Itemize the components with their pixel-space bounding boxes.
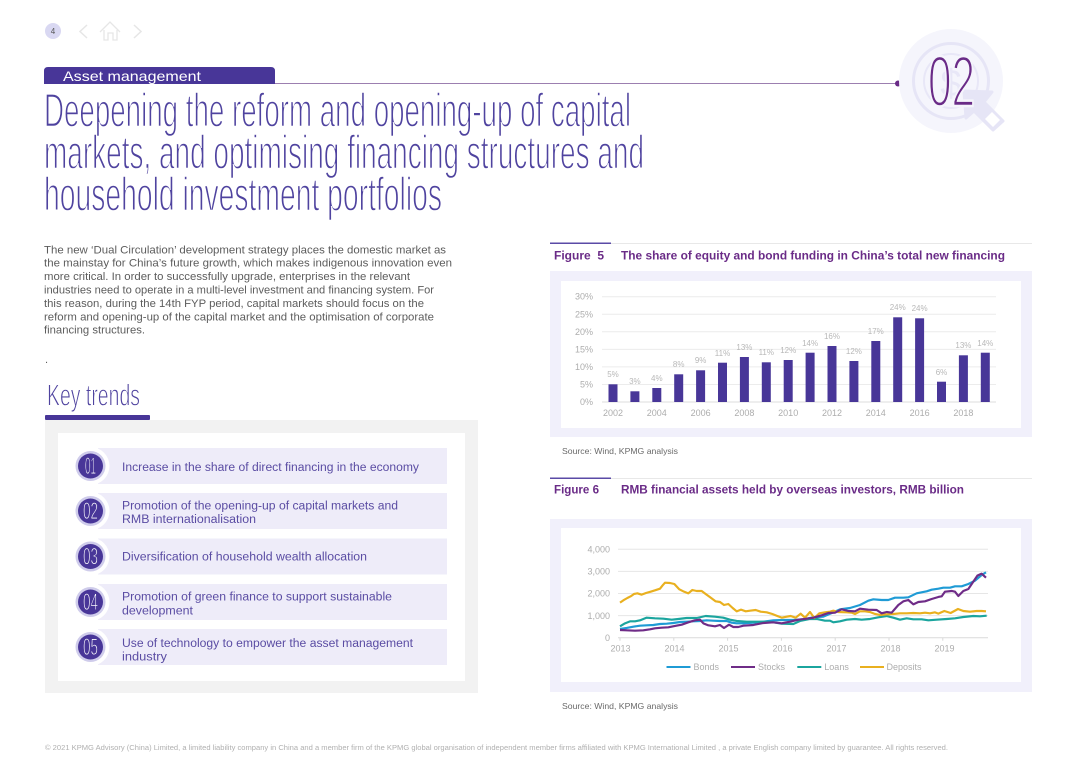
data labels [607, 303, 993, 386]
figure 6 heading: RMB financial assets held by overseas investors, RMB billion [621, 485, 964, 497]
y axis and grid: 0% [580, 397, 593, 407]
data labels: 11% [759, 348, 774, 357]
trend 02 [72, 492, 447, 530]
section tab: Asset management [63, 68, 201, 84]
x axis labels: 2015 [718, 644, 739, 654]
trend 04 [72, 583, 447, 621]
x axis labels: 2013 [610, 644, 631, 654]
x axis labels: 2019 [934, 644, 955, 654]
data labels: 3% [629, 377, 641, 386]
trend 02: RMB internationalisation [122, 514, 256, 526]
trend 02: 02 [83, 498, 98, 525]
legend: Stocks [758, 662, 786, 672]
figure 5 source: Source: Wind, KPMG analysis [562, 446, 678, 456]
y axis and grid [587, 544, 988, 643]
intro text block: . [45, 354, 48, 366]
intro text block: more critical. In order to successfully upgrade, enterprises in the relevant [44, 271, 410, 283]
y axis and grid: 2,000 [587, 589, 610, 599]
x axis labels: 2017 [826, 644, 847, 654]
trend 04: development [122, 605, 194, 617]
series: loans [620, 616, 987, 626]
trend 05: Use of technology to empower the asset management [122, 638, 414, 650]
y axis and grid [575, 292, 996, 407]
legend: Deposits [886, 662, 922, 672]
data labels: 12% [780, 346, 796, 355]
series: stocks [620, 574, 986, 631]
main title: markets, and optimising financing structures and [44, 126, 644, 178]
y axis and grid: 1,000 [587, 611, 610, 621]
data labels: 9% [695, 356, 706, 365]
icon: previous arrow [80, 25, 87, 38]
y axis and grid: 5% [580, 380, 593, 390]
panel: figure 6 line chart [550, 519, 1032, 692]
x axis labels: 2016 [910, 408, 930, 418]
section number emblem: $ [940, 63, 962, 105]
legend: Bonds [694, 662, 720, 672]
section number: 02 [928, 43, 975, 122]
trend 03: Diversification of household wealth allocation [122, 552, 367, 564]
trend 04: 04 [83, 589, 98, 616]
y axis and grid: 0 [605, 633, 610, 643]
figure 6 heading: Figure 6 [554, 485, 599, 497]
data labels: 14% [977, 339, 993, 348]
navigation bar [45, 22, 141, 40]
data labels: 8% [673, 360, 684, 369]
main title [44, 84, 644, 220]
x axis labels: 2014 [866, 408, 886, 418]
series: deposits [620, 583, 986, 618]
intro text block: this reason, during the 14th FYP period, capital markets should focus on the [44, 298, 424, 310]
line series [620, 572, 987, 631]
data labels: 5% [607, 370, 619, 379]
data labels: 12% [846, 347, 862, 356]
trend 05: 05 [83, 634, 98, 661]
trend 01: 01 [85, 453, 96, 480]
intro text block: reform and opening-up of the capital market and the optimisation of corporate [44, 311, 434, 323]
x axis labels: 2018 [953, 408, 973, 418]
main title: household investment portfolios [44, 168, 442, 220]
trend 04: Promotion of green finance to support sustainable [122, 592, 392, 604]
section number emblem [899, 29, 1003, 133]
figure 5 heading [550, 242, 1032, 262]
trend 03 [72, 538, 447, 576]
panel: key trends [45, 420, 478, 693]
trend 05: industry [122, 651, 167, 663]
x axis labels: 2010 [778, 408, 798, 418]
data labels: 4% [651, 374, 663, 383]
icon: home [100, 22, 120, 40]
data labels: 13% [955, 341, 971, 350]
x axis labels: 2016 [772, 644, 793, 654]
y axis and grid: 25% [575, 309, 593, 319]
main title: Deepening the reform and opening-up of capital [44, 84, 631, 136]
trend 05 [72, 628, 447, 666]
legend [666, 662, 922, 672]
series: bonds [620, 572, 986, 629]
icon: cursor arrow [964, 91, 1003, 130]
data labels: 11% [715, 349, 730, 358]
trend 02: Promotion of the opening-up of capital markets and [122, 500, 398, 512]
y axis and grid: 20% [575, 327, 593, 337]
y axis and grid: 30% [575, 292, 593, 302]
legend: Loans [824, 662, 849, 672]
x axis labels [610, 644, 955, 654]
intro text block: financing structures. [44, 325, 145, 337]
x axis labels: 2004 [647, 408, 667, 418]
x axis labels: 2002 [603, 408, 623, 418]
key trends accent bar [45, 415, 150, 420]
x axis labels: 2012 [822, 408, 842, 418]
icon: next arrow [134, 25, 141, 38]
intro text block: industries need to operate in a multi-level investment and financing system. For [44, 284, 434, 296]
x axis labels [603, 408, 973, 418]
y axis and grid: 3,000 [587, 567, 610, 577]
data labels: 24% [890, 303, 906, 312]
x axis labels: 2014 [664, 644, 685, 654]
header rule with end dot [275, 80, 901, 86]
section tab [44, 67, 275, 84]
data labels: 24% [912, 304, 928, 313]
intro text block [44, 244, 452, 366]
data labels: 6% [936, 368, 947, 377]
key trends heading: Key trends [47, 378, 140, 413]
trend 01 [72, 447, 447, 485]
bars [608, 317, 990, 402]
trend 03: 03 [83, 544, 98, 570]
intro text block: the mainstay for China’s future growth, which makes indigenous innovation even [44, 258, 452, 270]
x axis labels: 2008 [734, 408, 754, 418]
y axis and grid: 10% [575, 362, 593, 372]
y axis and grid: 15% [575, 344, 593, 354]
figure 6 source: Source: Wind, KPMG analysis [562, 701, 678, 711]
figure 5 heading: The share of equity and bond funding in China’s total new financing [621, 250, 1005, 262]
x axis labels: 2018 [880, 644, 901, 654]
y axis and grid: 4,000 [587, 544, 610, 554]
panel: figure 5 bar chart [550, 271, 1032, 437]
trend 01: Increase in the share of direct financing in the economy [122, 462, 419, 474]
page number badge: 4 [51, 27, 56, 36]
data labels: 13% [736, 343, 752, 352]
data labels: 17% [868, 327, 884, 336]
data labels: 16% [824, 332, 840, 341]
x axis labels: 2006 [691, 408, 711, 418]
intro text block: The new ‘Dual Circulation’ development strategy places the domestic market as [44, 244, 447, 256]
figure 6 heading [550, 478, 1032, 497]
data labels: 14% [802, 339, 818, 348]
figure 5 heading: Figure 5 [554, 250, 605, 262]
footer copyright: © 2021 KPMG Advisory (China) Limited, a limited liability company in China and a member firm of the KPMG global organisation of independent member firms affiliated with KPMG International Limited , a private English company limited by guarantee. All rights reserved. [45, 744, 948, 752]
